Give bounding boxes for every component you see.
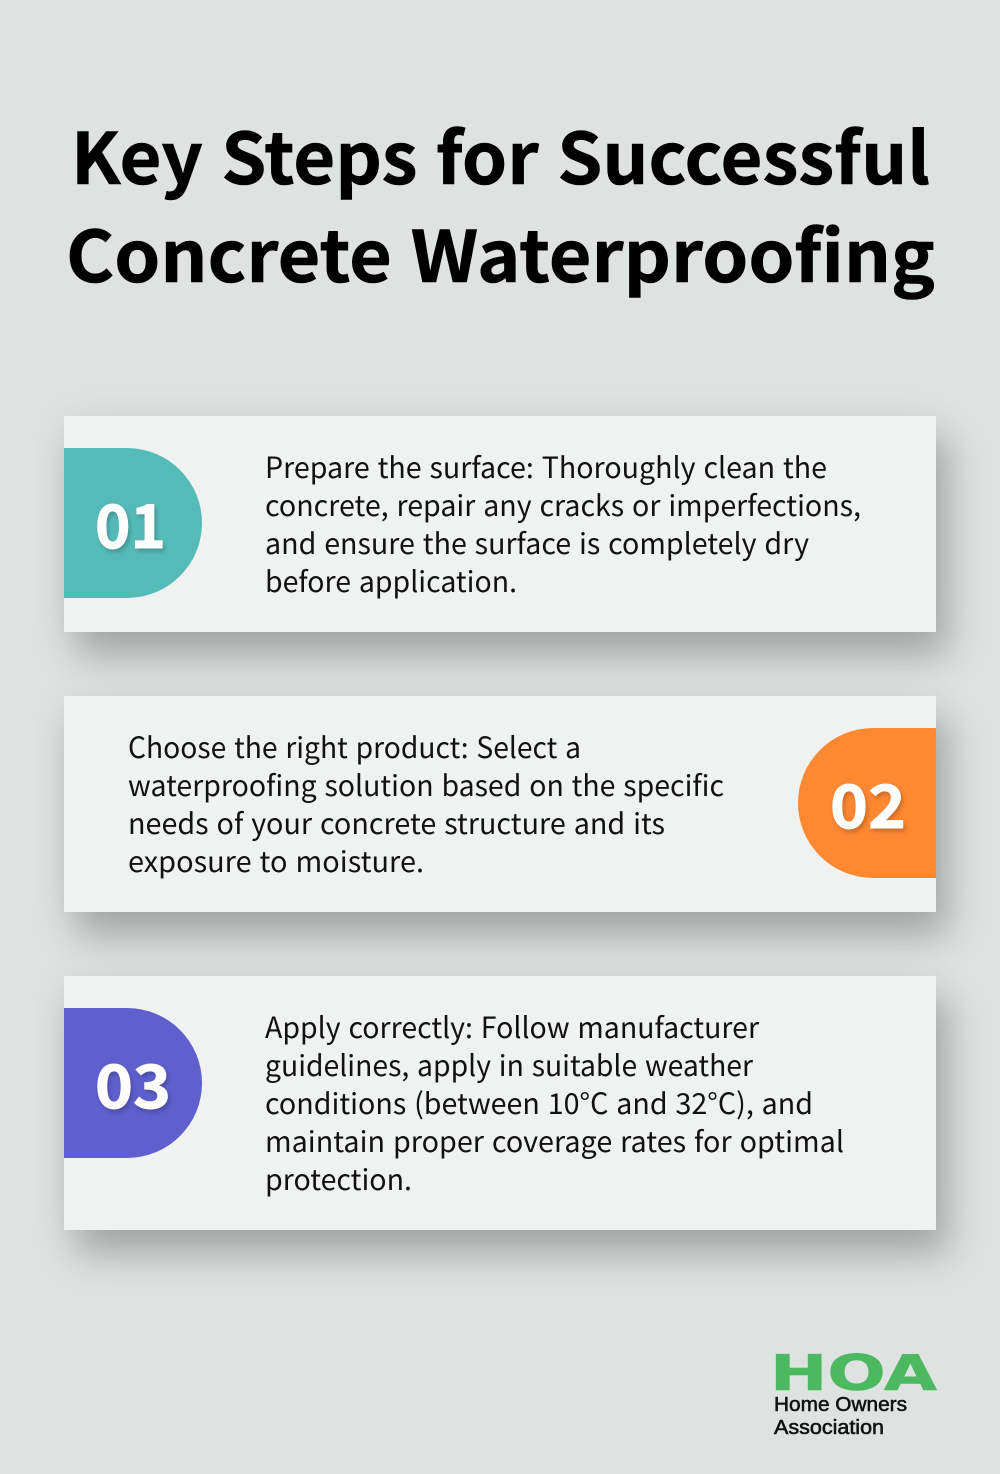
number 03: 03 xyxy=(95,1039,171,1126)
text: choose the right product: waterproofing solution based on the specific xyxy=(128,763,724,805)
title: Key Steps for Successful xyxy=(71,103,930,205)
title xyxy=(66,103,935,303)
text: choose the right product: Choose the right product: Select a xyxy=(128,725,581,767)
text: choose the right product xyxy=(128,725,724,881)
text: apply correctly: Apply correctly: Follow manufacturer xyxy=(265,1005,760,1047)
panel: step 2 xyxy=(64,696,936,912)
logo text: Home Owners xyxy=(774,1394,907,1416)
text: apply correctly xyxy=(265,1005,844,1199)
text: apply correctly: conditions (between 10°C and 32°C), and xyxy=(265,1081,813,1123)
text: choose the right product: needs of your concrete structure and its xyxy=(128,801,665,843)
text: prepare the surface xyxy=(265,445,861,601)
logo: HOA Home Owners Association xyxy=(770,1345,938,1439)
logo text: Association xyxy=(774,1417,884,1439)
logo text xyxy=(774,1394,907,1439)
badge: step 1 number xyxy=(64,448,202,598)
text: prepare the surface: Prepare the surface: Thoroughly clean the xyxy=(265,445,827,487)
logo mark: HOA: HOA xyxy=(770,1345,937,1402)
text: apply correctly: maintain proper coverage rates for optimal xyxy=(265,1119,844,1161)
panel: step 3 xyxy=(64,976,936,1230)
number 02: 02 xyxy=(830,759,906,846)
badge: step 3 number xyxy=(64,1008,202,1158)
text: prepare the surface: and ensure the surface is completely dry xyxy=(265,521,809,563)
number 01: 01 xyxy=(95,479,166,566)
text: choose the right product: exposure to moisture. xyxy=(128,839,424,881)
title: Concrete Waterproofing xyxy=(66,201,935,303)
panel: step 1 xyxy=(64,416,936,632)
text: prepare the surface: before application. xyxy=(265,559,517,601)
text: prepare the surface: concrete, repair any cracks or imperfections, xyxy=(265,483,861,525)
text: apply correctly: protection. xyxy=(265,1157,412,1199)
badge: step 2 number xyxy=(798,728,936,878)
text: apply correctly: guidelines, apply in suitable weather xyxy=(265,1043,754,1085)
